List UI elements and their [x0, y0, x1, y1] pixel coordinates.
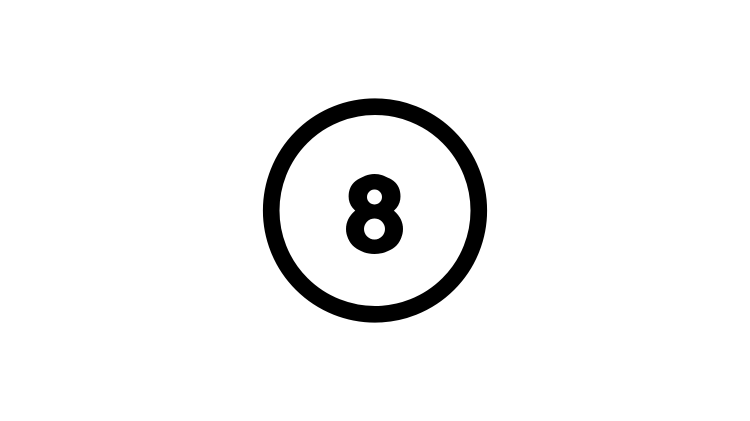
- icon: circle ring: [271, 107, 479, 314]
- number eight: 8: [346, 157, 403, 273]
